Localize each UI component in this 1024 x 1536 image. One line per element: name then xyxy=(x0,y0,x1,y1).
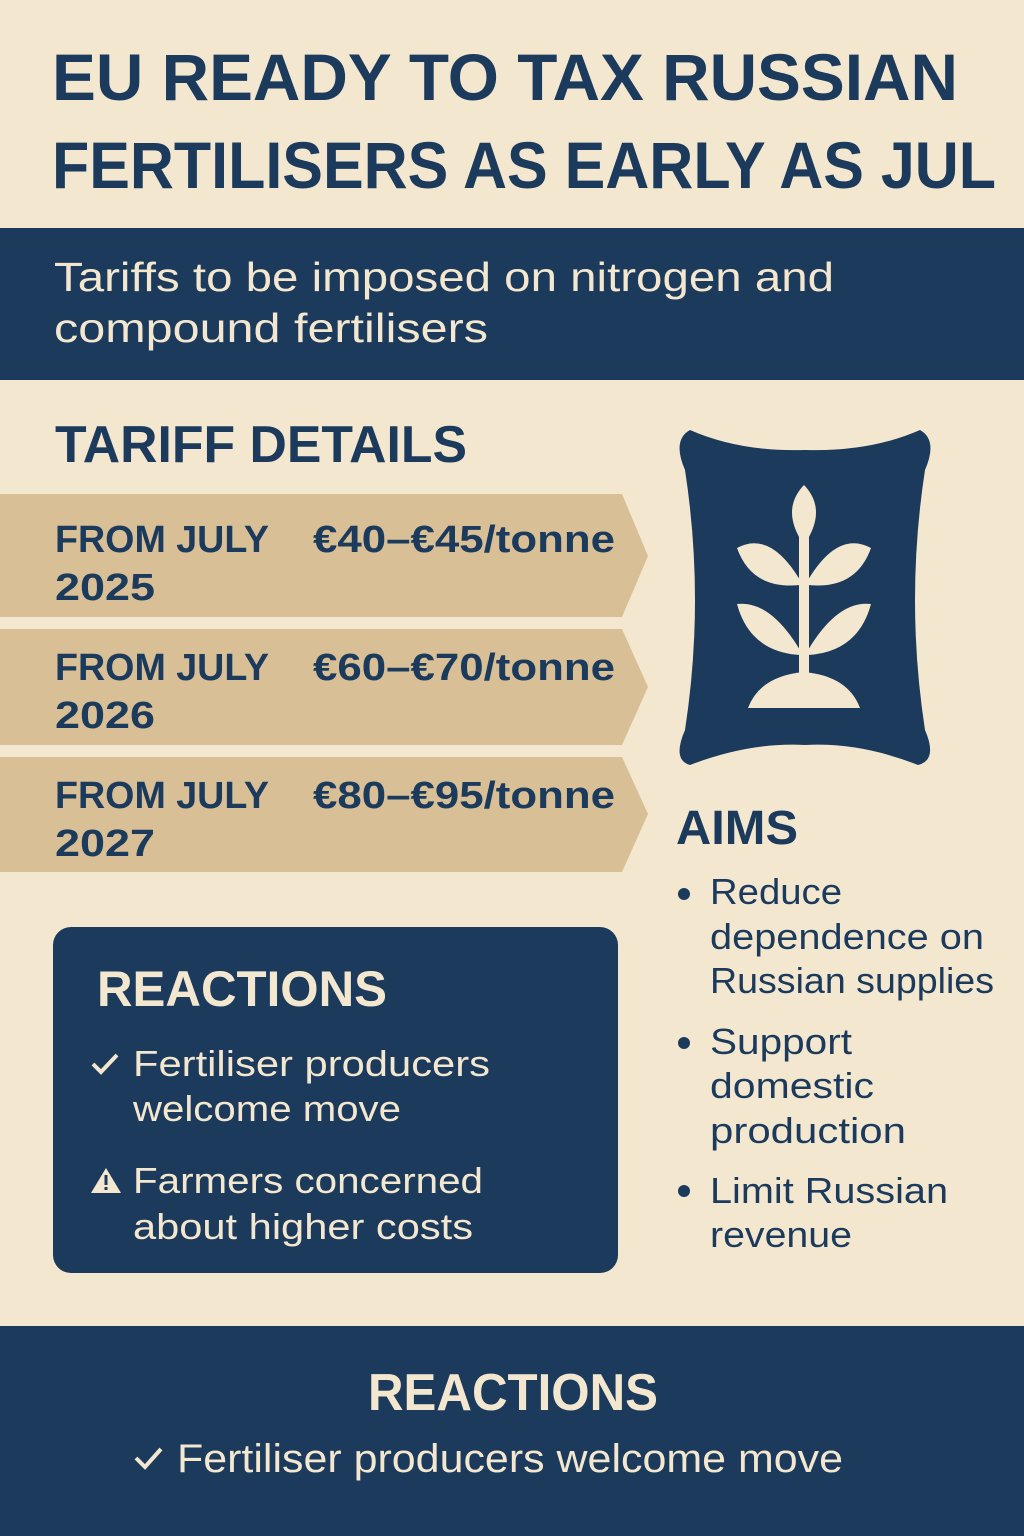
panel: reactions: REACTIONS xyxy=(97,961,387,1017)
bottom band: reactions: Fertiliser producers welcome move xyxy=(177,1437,843,1481)
aims list xyxy=(678,871,994,1255)
tariff row 2025: €40–€45/tonne xyxy=(313,519,615,561)
tariff row 2025 xyxy=(0,494,648,617)
heading: aims: AIMS xyxy=(676,802,798,855)
aims list: dependence on xyxy=(710,916,984,957)
aims list: Limit Russian xyxy=(710,1170,948,1211)
tariff row 2026: FROM JULY xyxy=(55,647,269,689)
title: EU READY TO TAX RUSSIAN xyxy=(52,40,958,114)
title xyxy=(52,40,996,202)
aims list: Support xyxy=(710,1021,852,1062)
aims list: revenue xyxy=(710,1214,852,1255)
aims list: production xyxy=(710,1110,906,1151)
aims list: Russian supplies xyxy=(710,960,994,1001)
heading: tariff details: TARIFF DETAILS xyxy=(55,416,467,474)
panel: reactions: Farmers concerned xyxy=(133,1160,483,1201)
tariff row 2027: 2027 xyxy=(55,823,155,865)
tariff row 2027: FROM JULY xyxy=(55,775,269,817)
panel: reactions: welcome move xyxy=(132,1088,401,1129)
tariff row 2027 xyxy=(0,757,648,872)
aims list: Reduce xyxy=(710,871,842,912)
bottom band: reactions: REACTIONS xyxy=(368,1364,658,1422)
panel: reactions: about higher costs xyxy=(133,1206,473,1247)
panel: reactions xyxy=(53,927,618,1273)
tariff row 2025: 2025 xyxy=(55,567,155,609)
tariff row 2026: €60–€70/tonne xyxy=(313,647,615,689)
tariff row 2026: 2026 xyxy=(55,695,155,737)
aims list: domestic xyxy=(710,1065,874,1106)
tariff row 2027: €80–€95/tonne xyxy=(313,775,615,817)
subtitle band xyxy=(0,228,1024,380)
icon: fertiliser bag xyxy=(680,430,930,765)
bottom band: reactions xyxy=(0,1326,1024,1536)
tariff row 2026 xyxy=(0,629,648,745)
subtitle band: Tariffs to be imposed on nitrogen and xyxy=(54,254,834,300)
panel: reactions: Fertiliser producers xyxy=(133,1043,490,1084)
subtitle band: compound fertilisers xyxy=(54,305,488,351)
tariff row 2025: FROM JULY xyxy=(55,519,269,561)
